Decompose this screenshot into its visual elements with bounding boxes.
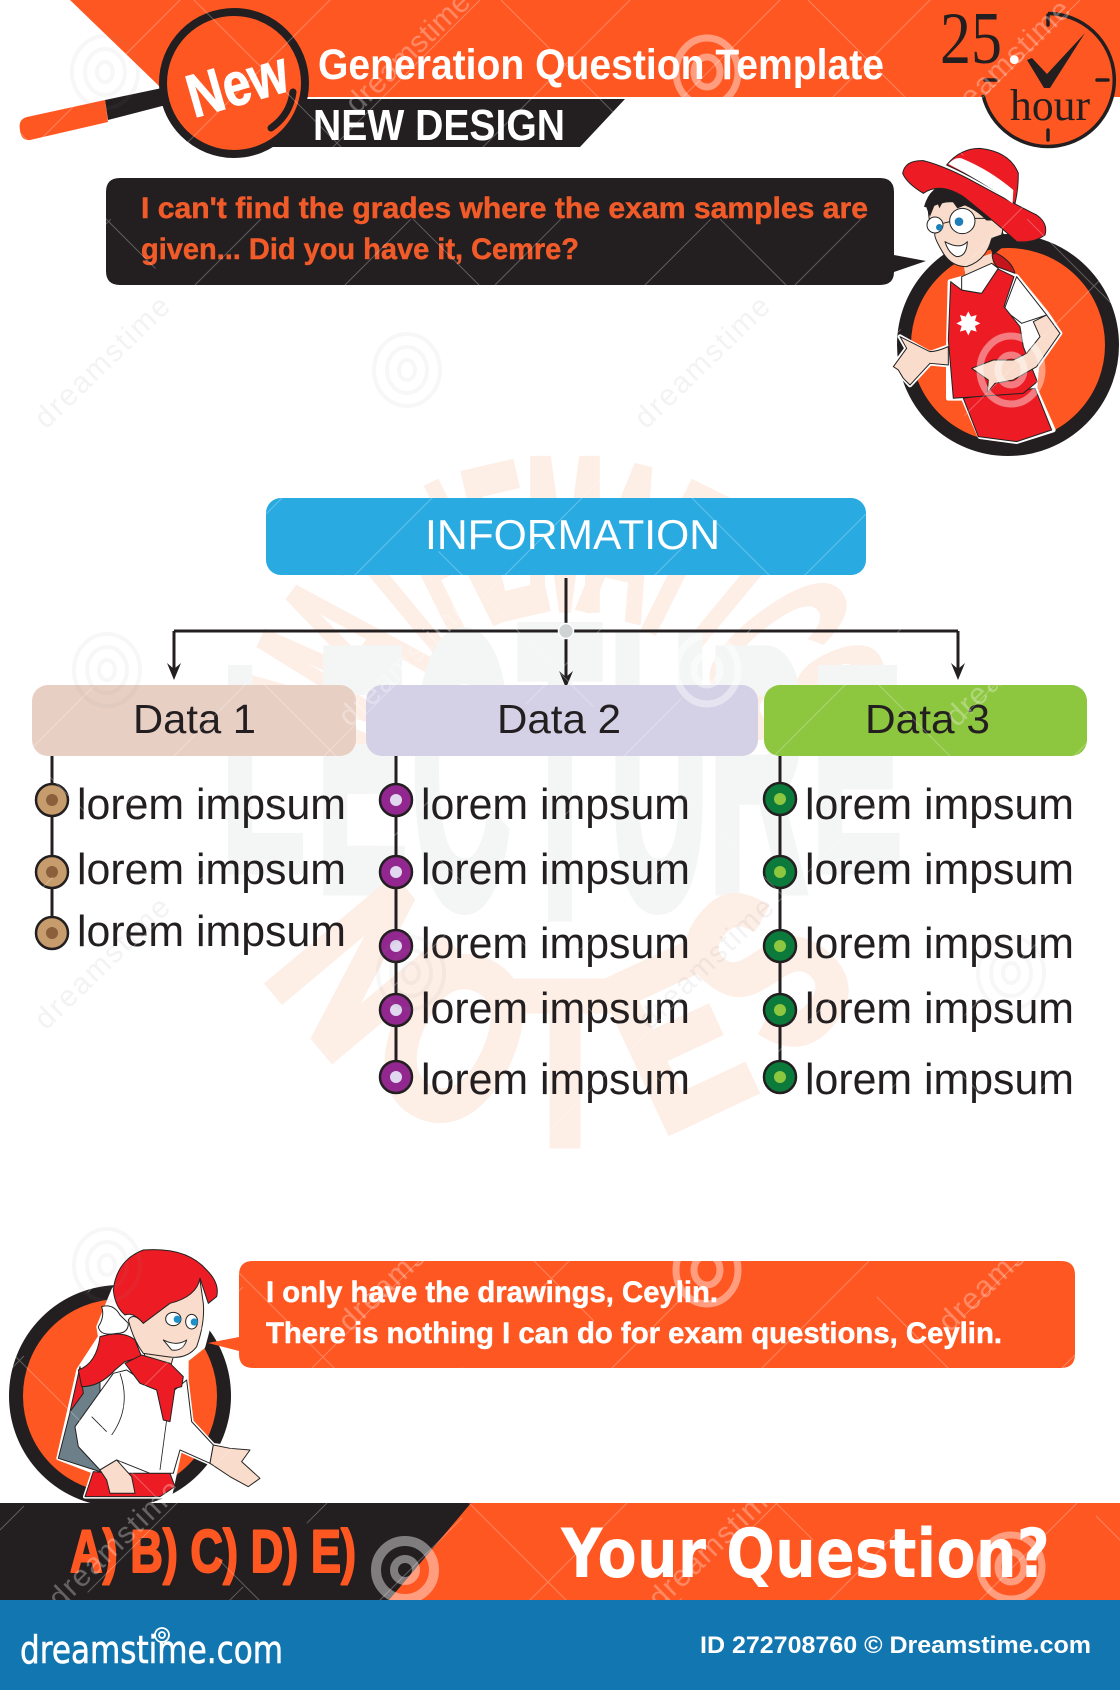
background globe watermark: lecture notes: C: [411, 553, 511, 988]
answer choices: A) B) C) D) E): [70, 1518, 356, 1585]
speech bubble: Cemre answer: I only have the drawings, Ceylin.: [266, 1276, 718, 1309]
background globe watermark: lecture notes: I: [646, 491, 824, 698]
mouth: [163, 1340, 187, 1350]
data 3 header: Data 3: [865, 696, 990, 742]
background globe watermark: lecture notes: O: [339, 893, 568, 1185]
speech bubble: Cemre answer: There is nothing I can do for exam questions, Ceylin.: [266, 1317, 1002, 1350]
speech bubble: Ceylin question: [106, 178, 926, 285]
data 2 list: lorem impsum: [421, 845, 690, 894]
character: girl with red hat in circle: [893, 148, 1112, 449]
background globe watermark: lecture notes: E: [811, 608, 903, 933]
background globe watermark: lecture notes: A: [234, 537, 472, 741]
background globe watermark: lecture notes: U: [609, 553, 709, 988]
background globe watermark: lecture notes: H: [361, 436, 532, 687]
clock number: 25: [940, 0, 1002, 80]
stock photo watermark text: dreamstime: [632, 891, 781, 1036]
glasses: [927, 217, 943, 233]
stock photo watermark text: dreamstime: [28, 891, 177, 1036]
data 1 list: [36, 780, 346, 956]
New word: New: [179, 37, 296, 130]
background globe watermark: lecture notes: N: [224, 839, 502, 1100]
title: generation question template: Generation Question Template: [318, 41, 884, 89]
background globe watermark: lecture notes: S: [683, 612, 934, 771]
data 3 list: lorem impsum: [805, 984, 1074, 1033]
background globe watermark: lecture notes: S: [631, 842, 903, 1097]
neck: [963, 253, 993, 282]
data 2 header: Data 2: [497, 696, 621, 742]
face: [928, 202, 1003, 267]
star: [956, 311, 980, 335]
background globe watermark: lecture notes: T: [294, 481, 496, 708]
shirt: [75, 1370, 213, 1473]
hands: [210, 1445, 260, 1487]
footer credit bar: [0, 1600, 1120, 1690]
speech bubble: Ceylin question: given... Did you have it, Cemre?: [141, 233, 579, 266]
neck: [143, 1350, 173, 1375]
hat brim: [903, 161, 1046, 242]
data 2 list: lorem impsum: [421, 919, 690, 968]
data 2 list: lorem impsum: [421, 1055, 690, 1104]
data 1 header: [32, 685, 356, 756]
collar: [125, 1355, 183, 1422]
arm and hand: [972, 315, 1060, 393]
clock unit: hour: [1010, 81, 1090, 130]
clock number period: .: [1005, 0, 1024, 80]
stock photo watermark text: dreamstime: [42, 1473, 187, 1615]
sleeve: [1004, 277, 1047, 323]
data 2 list: [380, 780, 690, 1104]
panel: data 3: [764, 685, 1087, 1104]
speech bubble: Ceylin question: I can't find the grades where the exam samples are: [141, 192, 868, 225]
logo: dreamstime.com: [20, 1628, 283, 1672]
backpack: [58, 1373, 100, 1472]
connector arrows from information to data boxes: [167, 578, 965, 688]
panel: data 1: [32, 685, 356, 956]
clock badge: [940, 0, 1114, 146]
background globe watermark: lecture notes: T: [513, 933, 617, 1194]
data 1 list: lorem impsum: [77, 845, 346, 894]
hair: [113, 1250, 217, 1323]
background globe watermark: lecture notes: E: [570, 897, 783, 1181]
white halo: [58, 1250, 260, 1497]
data 3 list: [764, 780, 1074, 1104]
ribbon: [98, 1306, 128, 1334]
data 1 list: lorem impsum: [77, 907, 346, 956]
information box: [266, 498, 866, 575]
panel: data 2: [366, 685, 758, 1104]
hat crown: [947, 148, 1018, 203]
background globe watermark: lecture notes: E: [445, 413, 563, 668]
background globe watermark: lecture notes: T: [602, 438, 764, 685]
data 2 list: lorem impsum: [421, 780, 690, 829]
stock photo watermark text: dreamstime: [932, 1196, 1077, 1338]
background globe watermark: lecture notes: [193, 410, 934, 1194]
data 3 list: lorem impsum: [805, 845, 1074, 894]
fringe: [927, 183, 970, 217]
background globe watermark: lecture notes: M: [525, 410, 605, 657]
stock photo watermark text: dreamstime: [939, 591, 1084, 733]
face: [128, 1280, 204, 1357]
stock photo watermark text: dreamstime: [628, 290, 777, 435]
data 3 list: lorem impsum: [805, 919, 1074, 968]
data 1 list: lorem impsum: [77, 780, 346, 829]
skirt: [85, 1472, 175, 1497]
background globe watermark: lecture notes: T: [518, 538, 602, 1004]
magnifier icon with New label: [20, 12, 305, 154]
checkmark: [1027, 33, 1085, 88]
braid: [992, 252, 1015, 273]
collar: [962, 263, 998, 293]
pants: [963, 388, 1052, 442]
background globe watermark: lecture notes: L: [221, 608, 305, 933]
character: girl with backpack in circle: [16, 1250, 260, 1500]
data 1 header: Data 1: [133, 696, 256, 742]
stock photo watermark text: dreamstime: [642, 1473, 787, 1615]
background globe watermark: lecture notes: M: [193, 605, 450, 778]
data 3 header: [764, 685, 1087, 756]
data 3 list: lorem impsum: [805, 780, 1074, 829]
image id: ID 272708760 © Dreamstime.com: [700, 1632, 1091, 1659]
answer strip: black left side: [0, 1503, 1120, 1600]
speech bubble: Cemre answer: [208, 1261, 1075, 1368]
subtitle: new design: NEW DESIGN: [313, 101, 565, 150]
eyes: [166, 1312, 181, 1326]
logo spiral: [155, 1628, 169, 1642]
stock photo watermark text: dreamstime: [28, 290, 177, 435]
new design black ribbon: [270, 99, 625, 147]
data 2 list: lorem impsum: [421, 984, 690, 1033]
background globe watermark: lecture notes: R: [708, 576, 808, 964]
information box: INFORMATION: [425, 511, 720, 558]
hair: [924, 183, 1004, 255]
data 3 list: lorem impsum: [805, 1055, 1074, 1104]
header orange banner: [70, 0, 1120, 140]
background globe watermark: lecture notes: E: [316, 576, 408, 964]
background globe watermark: lecture notes: A: [564, 413, 688, 668]
ponytail: [78, 1334, 142, 1387]
apron: [948, 268, 1037, 398]
handle: [20, 88, 166, 140]
mouth: [945, 242, 967, 257]
white halo: [893, 268, 1060, 442]
background globe watermark: lecture notes: C: [658, 537, 896, 741]
data 2 header: [366, 685, 758, 756]
stock photo watermark text: dreamstime: [332, 1196, 477, 1338]
stock photo watermark text: dreamstime: [332, 591, 477, 733]
